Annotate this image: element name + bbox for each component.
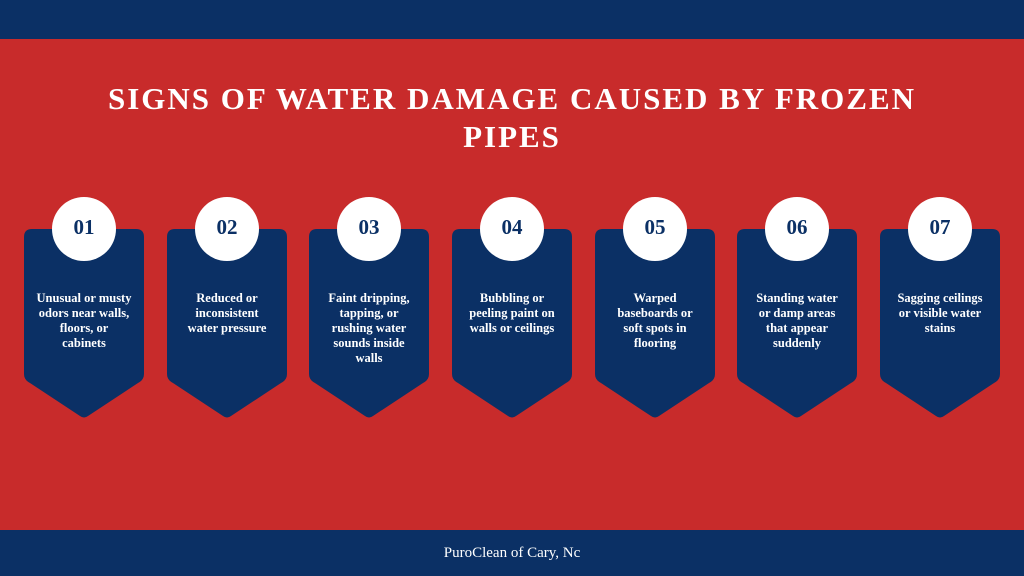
card 06: 06 xyxy=(786,215,808,239)
card 05 xyxy=(595,197,715,418)
card 01: 01 xyxy=(74,215,94,239)
card 03: Faint dripping, xyxy=(328,291,410,305)
card 04: 04 xyxy=(502,215,522,239)
card 03: tapping, or xyxy=(339,306,399,320)
card 03: 03 xyxy=(358,215,380,239)
card 06 xyxy=(737,197,857,418)
card 04: peeling paint on xyxy=(469,306,555,320)
card 04: walls or ceilings xyxy=(470,321,554,335)
card 04 xyxy=(452,197,572,418)
card 05: 05 xyxy=(644,215,666,239)
card 02: Reduced or xyxy=(196,291,258,305)
footer xyxy=(0,530,1024,576)
card 02: inconsistent xyxy=(195,306,259,320)
card 06: suddenly xyxy=(773,336,821,350)
card 07: 07 xyxy=(930,215,950,239)
card 03 xyxy=(309,197,429,418)
card 03: sounds inside xyxy=(333,336,405,350)
card 02: 02 xyxy=(216,215,238,239)
card 07: Sagging ceilings xyxy=(897,291,983,305)
card 01: Unusual or musty xyxy=(37,291,131,305)
card 02: water pressure xyxy=(188,321,266,335)
card 05: flooring xyxy=(634,336,676,350)
footer: PuroClean of Cary, Nc xyxy=(444,545,580,561)
title: SIGNS OF WATER DAMAGE CAUSED BY FROZEN PIPES xyxy=(108,81,916,154)
card 07 xyxy=(880,197,1000,418)
card 06: or damp areas xyxy=(759,306,835,320)
card 04: Bubbling or xyxy=(480,291,544,305)
card 07: or visible water xyxy=(899,306,981,320)
card 05: baseboards or xyxy=(617,306,693,320)
card 07: stains xyxy=(925,321,955,335)
card 05: Warped xyxy=(633,291,677,305)
card 01: odors near walls, xyxy=(39,306,129,320)
card 01: floors, or xyxy=(60,321,108,335)
card 02 xyxy=(167,197,287,418)
card 05: soft spots in xyxy=(623,321,687,335)
card 03: rushing water xyxy=(332,321,406,335)
card 06: Standing water xyxy=(756,291,838,305)
card 01 xyxy=(24,197,144,418)
card 01: cabinets xyxy=(62,336,106,350)
card 03: walls xyxy=(355,351,383,365)
card 06: that appear xyxy=(766,321,828,335)
